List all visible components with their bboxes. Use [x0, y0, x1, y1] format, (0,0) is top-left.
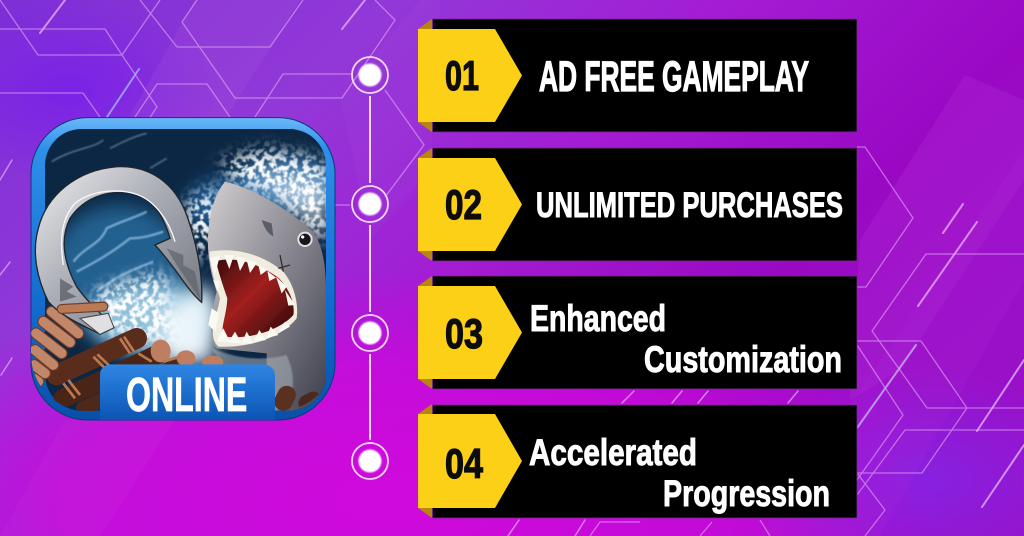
- panel: feature 1: [418, 19, 857, 132]
- panel: feature 2: [418, 148, 857, 261]
- number tag 01: [418, 29, 522, 122]
- timeline node 2: [352, 186, 388, 222]
- shark: [208, 182, 326, 411]
- number tag 01: 01: [445, 52, 479, 99]
- heading: ad free gameplay: AD FREE GAMEPLAY: [539, 53, 809, 101]
- ocean: [45, 129, 337, 411]
- icon: game app icon: [31, 118, 337, 422]
- timeline node 1: [352, 57, 388, 93]
- artwork: [45, 129, 337, 411]
- number tag 04: 04: [445, 440, 484, 487]
- number tag 04: [418, 414, 522, 508]
- number tag 03: [418, 286, 522, 379]
- heading: accelerated progression: Progression: [663, 473, 830, 514]
- hook: [35, 167, 202, 334]
- timeline connector: [352, 57, 388, 479]
- heading: unlimited purchases: UNLIMITED PURCHASES: [536, 186, 843, 225]
- panel: feature 3: [418, 276, 857, 389]
- heading: enhanced customization: Customization: [644, 339, 842, 380]
- online badge: [100, 364, 275, 422]
- heading: enhanced customization: Enhanced: [530, 298, 666, 339]
- heading: accelerated progression: [529, 432, 830, 514]
- number tag 02: 02: [445, 181, 482, 228]
- number tag 02: [418, 158, 522, 251]
- panel: feature 4: [418, 404, 857, 518]
- wooden raft and ropes: [33, 312, 313, 411]
- timeline node 3: [352, 315, 388, 351]
- timeline node 4: [352, 443, 388, 479]
- heading: accelerated progression: Accelerated: [529, 432, 697, 473]
- icon frame: [31, 118, 335, 420]
- number tag 03: 03: [445, 310, 483, 357]
- online label: ONLINE: [126, 368, 247, 422]
- heading: enhanced customization: [530, 298, 842, 380]
